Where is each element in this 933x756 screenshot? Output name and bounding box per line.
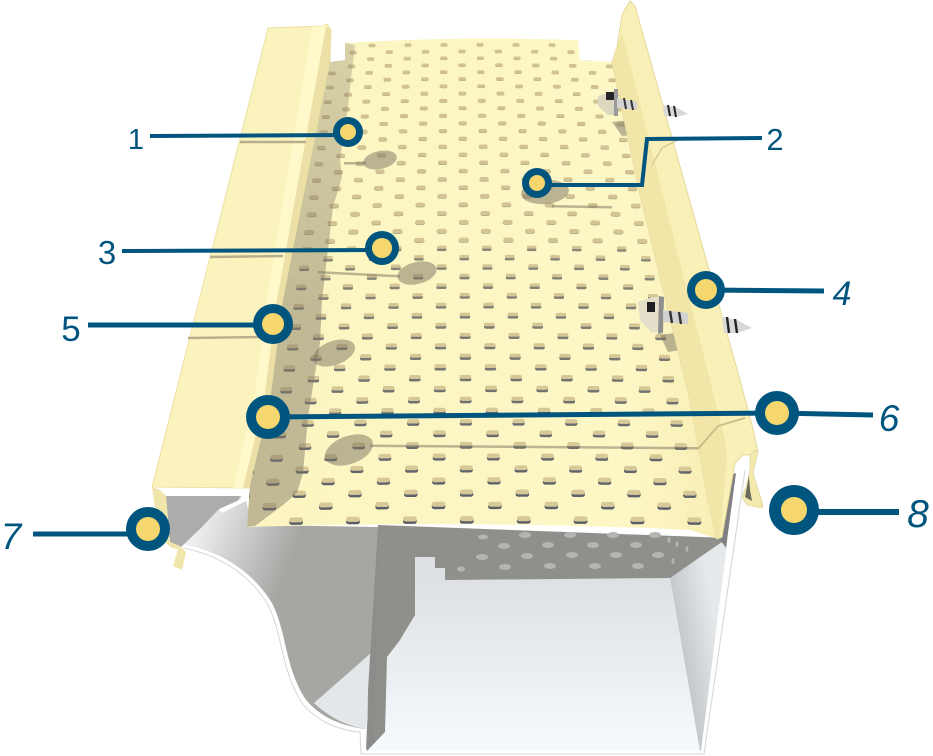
- screw tip lower: [722, 317, 752, 333]
- left hanging clip: [152, 487, 186, 570]
- inner hook: [219, 490, 248, 513]
- callout 5: 5: [61, 310, 81, 349]
- callout 1: [128, 117, 363, 156]
- left cross section: [158, 488, 247, 546]
- left rail highlight stripe: [233, 25, 326, 488]
- left rail seams: [188, 142, 306, 338]
- right rail outer face: [612, 1, 758, 539]
- perforated panel: [247, 38, 716, 538]
- hanging lip: [742, 450, 763, 508]
- callout 7: [1, 507, 170, 557]
- callout 6: [246, 391, 900, 439]
- callout 4: [687, 271, 851, 313]
- callout 7: 7: [1, 516, 23, 557]
- shade behind right wall edge: [721, 473, 736, 548]
- ellipse shadows: [363, 150, 397, 170]
- perforated shadow spots: [457, 532, 688, 572]
- callout 1: 1: [128, 124, 144, 156]
- left rail shadow: [245, 43, 355, 527]
- screw upper: [598, 89, 688, 117]
- thin line shadows: [344, 162, 366, 164]
- callout 5: [61, 304, 293, 349]
- left rail top face: [152, 24, 331, 488]
- right rail seams: [652, 139, 680, 165]
- right rail: [612, 1, 763, 539]
- callout 6: 6: [879, 398, 900, 439]
- left interior wall: [166, 496, 378, 729]
- top hook of wall: [735, 460, 748, 474]
- panel holes: [249, 43, 702, 525]
- panel shadow on back wall: [367, 525, 728, 751]
- callout 2: [522, 122, 784, 198]
- callout 3: [98, 231, 399, 271]
- panel shadows: [245, 43, 700, 527]
- left rail: [152, 24, 331, 488]
- lip inner shadow: [745, 476, 752, 501]
- left rail wall: [243, 26, 331, 488]
- callout 8: [769, 485, 929, 536]
- right rail inner band: [612, 32, 727, 539]
- screw tip upper: [663, 105, 688, 117]
- right interior wall: [670, 540, 731, 751]
- callout 3: 3: [98, 234, 116, 271]
- screw lower: [638, 296, 752, 334]
- callout 4: 4: [833, 275, 851, 313]
- back wall: [366, 527, 730, 751]
- right white wall edge: [701, 470, 745, 754]
- screw shadows: [612, 120, 627, 136]
- gutter body: [156, 470, 745, 754]
- left wall lower light area: [314, 653, 371, 729]
- callout 2: 2: [766, 122, 784, 157]
- callout 8: 8: [907, 493, 929, 536]
- outline of gutter body: [183, 470, 745, 754]
- divider strip fold: [366, 527, 378, 750]
